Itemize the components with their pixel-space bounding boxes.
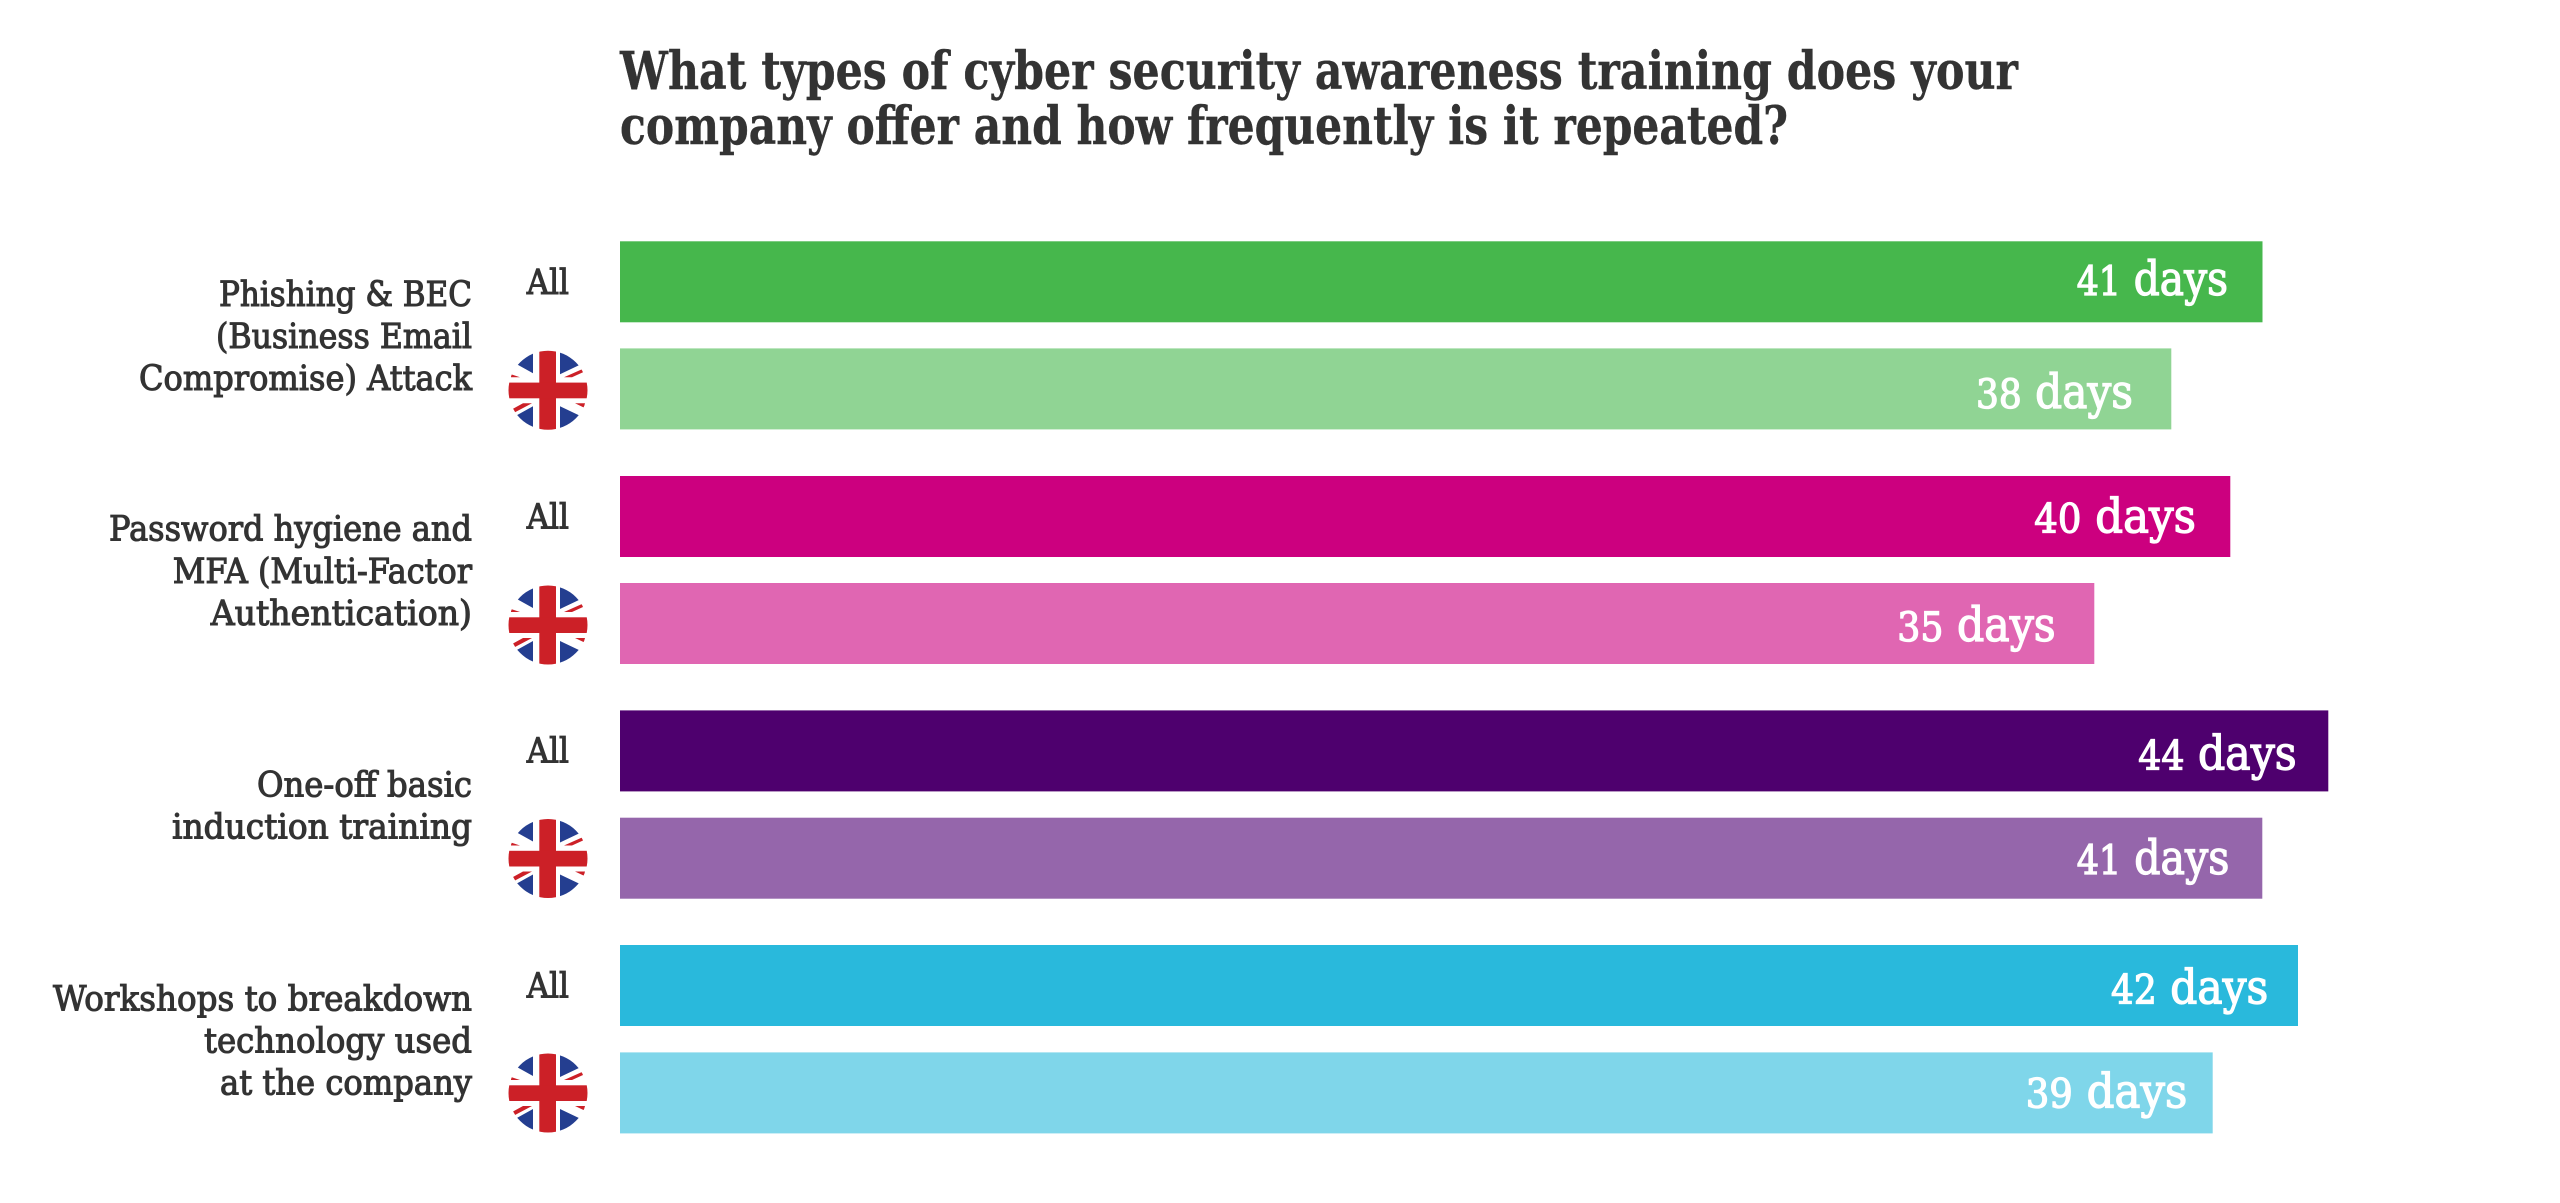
label: workshops category: at the company [220, 1063, 472, 1103]
panel: workshops group [53, 945, 2298, 1138]
label: induction category [172, 766, 472, 847]
bar: all 41 days: 41 days [2077, 252, 2228, 307]
label: all respondents: All [526, 263, 569, 303]
bar: UK 39 days: 39 days [2026, 1064, 2187, 1119]
bar: UK 38 days [620, 348, 2171, 429]
bar: UK 41 days [620, 818, 2262, 899]
title: company offer and how frequently is it repeated? [620, 96, 1788, 157]
label: password category: Authentication) [210, 594, 472, 634]
label: phishing category: Phishing & BEC [219, 275, 472, 315]
label: phishing category: (Business Email [216, 317, 472, 357]
title: What types of cyber security awareness training does your [619, 41, 2018, 102]
label: password category: Password hygiene and [109, 510, 472, 550]
bar: all 40 days: 40 days [2034, 490, 2196, 545]
label: workshops category [53, 980, 472, 1103]
icon: UK flag [508, 580, 588, 670]
bar: all 41 days [620, 241, 2262, 322]
bar: UK 35 days [620, 583, 2094, 664]
bar: all 44 days [620, 710, 2328, 791]
panel: password group [109, 476, 2230, 670]
bar: all 42 days: 42 days [2111, 960, 2268, 1015]
label: password category [109, 510, 472, 634]
panel: induction group [172, 710, 2328, 904]
label: all respondents: All [526, 497, 569, 537]
bar: UK 35 days: 35 days [1897, 598, 2056, 653]
bar: UK 41 days: 41 days [2077, 831, 2229, 886]
label: phishing category: Compromise) Attack [139, 359, 473, 399]
label: all respondents: All [526, 967, 569, 1007]
bar: all 42 days [620, 945, 2298, 1026]
label: induction category: One-off basic [257, 766, 472, 806]
panel: phishing group [139, 241, 2262, 435]
bar: UK 38 days: 38 days [1976, 365, 2133, 420]
bar: UK 39 days [620, 1052, 2213, 1133]
label: workshops category: Workshops to breakdown [53, 980, 472, 1020]
icon: UK flag [508, 1048, 588, 1138]
icon: UK flag [508, 814, 588, 904]
label: workshops category: technology used [204, 1022, 472, 1062]
title [619, 41, 2018, 157]
bar: all 44 days: 44 days [2138, 726, 2297, 781]
bar: all 40 days [620, 476, 2230, 557]
icon: UK flag [508, 345, 588, 435]
label: password category: MFA (Multi-Factor [173, 552, 472, 592]
label: all respondents: All [526, 732, 569, 772]
label: phishing category [139, 275, 473, 399]
label: induction category: induction training [172, 807, 472, 847]
